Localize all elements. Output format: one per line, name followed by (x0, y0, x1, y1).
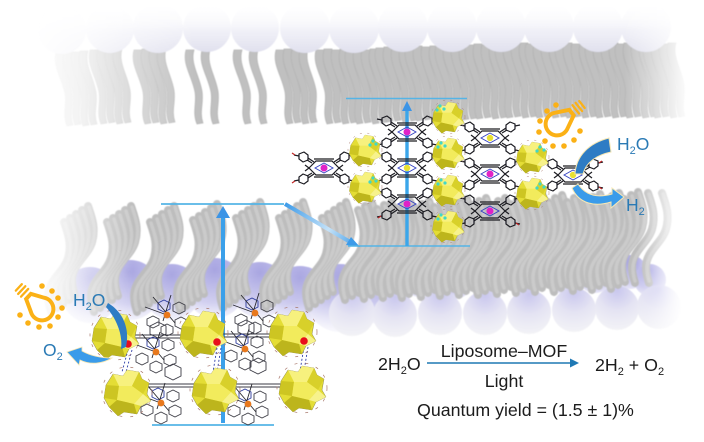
reaction arrow (427, 358, 579, 368)
label: O2 left: 2 (57, 351, 63, 363)
iridium photosensitiser complexes (134, 293, 275, 425)
MOF layer spacing bars and arrow (152, 204, 284, 425)
top lipid leaflet (62, 24, 682, 126)
red oxygen atoms (124, 337, 308, 348)
catalyst label: Liposome–MOF (441, 341, 567, 361)
label: H2O right: O (636, 134, 649, 154)
label: H2 right: H (626, 195, 639, 215)
label: H2O left: H (73, 290, 86, 310)
arrow: H2O in and O2 out, left (67, 303, 127, 365)
products: 2H (595, 355, 618, 375)
label: O2 left: O (43, 340, 57, 360)
icon: rays of top right bulb (536, 102, 583, 149)
front row lipid heads (329, 285, 681, 337)
MOF layer spacing bars and arrow (346, 98, 470, 246)
reaction equation (378, 341, 664, 420)
icon: light bulb bottom left (11, 279, 58, 325)
arrow: H2O in and H2 out, right (572, 138, 624, 208)
bottom leaflet tails (48, 192, 669, 312)
panel: bottom MOF structure (water oxidation) (90, 204, 327, 425)
label: H2O left: 2 (86, 301, 92, 313)
yellow metal clusters (90, 307, 327, 417)
quantum yield: Quantum yield = (1.5 ± 1)% (417, 400, 634, 420)
icon: light bulb top right (541, 95, 589, 140)
porphyrin metal centres (320, 128, 576, 214)
condition label: Light (485, 371, 523, 391)
label: H2O right: H (617, 134, 630, 154)
back row purple lipid heads (67, 258, 380, 330)
label: H2 right: 2 (639, 206, 645, 218)
top leaflet lipid heads (97, 24, 666, 54)
callout: slanted zoom arrow between MOF layers (285, 204, 360, 247)
reactant: O (407, 354, 421, 374)
yellow metal clusters (348, 100, 549, 243)
cyan catalyst fragments (368, 104, 546, 221)
label: H2O left: O (92, 290, 105, 310)
products: + O (624, 355, 658, 375)
reactant: 2H (378, 354, 401, 374)
orange iridium centres (153, 310, 258, 407)
products: 2 (658, 366, 664, 378)
label: H2O right: 2 (630, 145, 636, 157)
carboxylate end groups (292, 118, 602, 225)
reactant: 2 (401, 365, 407, 377)
horizontal linkers (122, 320, 308, 387)
top leaflet tails (55, 43, 685, 126)
bottom lipid leaflet (48, 192, 681, 337)
products: 2 (618, 366, 624, 378)
icon: rays of bottom left bulb (17, 283, 65, 330)
panel: top MOF structure (hydrogen evolution) (292, 98, 603, 246)
porphyrin linkers (294, 116, 603, 227)
